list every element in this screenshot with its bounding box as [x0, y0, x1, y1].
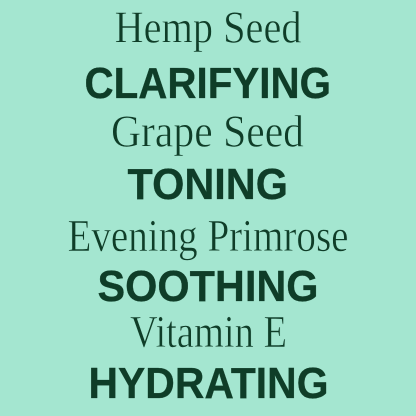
- ingredient: Evening Primrose: Evening Primrose: [68, 211, 348, 261]
- ingredient: Vitamin E: Vitamin E: [130, 307, 287, 357]
- benefit: Clarifying: CLARIFYING: [84, 60, 331, 108]
- benefit: Soothing: SOOTHING: [98, 263, 318, 311]
- ingredient: Hemp Seed: Hemp Seed: [114, 2, 302, 52]
- benefit: Toning: TONING: [128, 161, 288, 209]
- ingredient: Grape Seed: Grape Seed: [111, 106, 304, 156]
- benefit: Hydrating: HYDRATING: [88, 360, 328, 408]
